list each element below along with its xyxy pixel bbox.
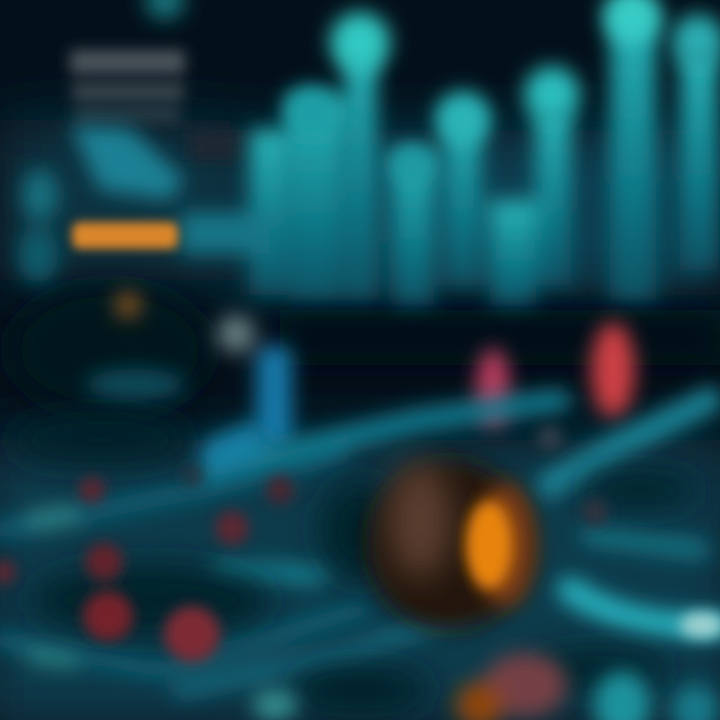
- lower field streaks: [0, 400, 720, 690]
- bar caps: glowing round tops: [145, 0, 720, 185]
- panel: grey text block, top left: [70, 50, 240, 160]
- bright spot, lower right: [680, 612, 720, 638]
- teal mounds, bottom right: [253, 671, 719, 720]
- dark band between charts and lower field: [10, 285, 720, 415]
- icon: coin barrel with orange face: [366, 459, 535, 631]
- circular gauge, left: [85, 292, 292, 450]
- highlight: orange bar: [72, 222, 178, 249]
- sphere: bottom centre red and orange: [456, 653, 567, 720]
- shape: teal swoosh, left: [18, 125, 185, 283]
- bar chart: teal glowing bars: [180, 10, 718, 305]
- red pins: [476, 322, 635, 428]
- dark mottling in lower field: [10, 416, 700, 714]
- red spheres: [0, 425, 608, 662]
